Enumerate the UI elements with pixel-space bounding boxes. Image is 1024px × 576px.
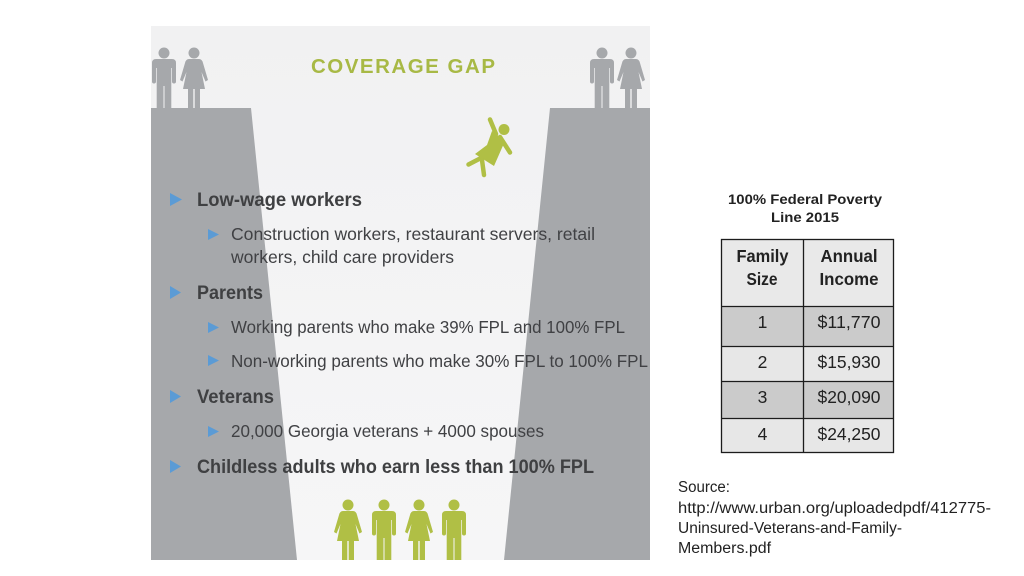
sub-bullet: construction workers [208, 224, 595, 267]
sub-bullet: Georgia veterans: 20,000 Georgia veterans + 4000 spouses [231, 421, 544, 441]
table: family size and annual income: $20,090 [818, 387, 881, 407]
source note [678, 479, 991, 557]
table: family size and annual income: $15,930 [818, 352, 881, 372]
bullet: veterans: Veterans [197, 386, 274, 408]
bullet: low-wage workers: Low-wage workers [197, 189, 362, 211]
panel: coverage gap background [151, 26, 650, 560]
table heading: Line 2015 [771, 209, 839, 225]
icon: couple on right cliff [590, 48, 645, 108]
table: family size and annual income: Family [736, 246, 789, 266]
bullet: parents: Parents [197, 282, 263, 304]
bullet: parents [170, 282, 263, 304]
source note: http://www.urban.org/uploadedpdf/412775- [678, 500, 991, 517]
left cliff [151, 108, 297, 560]
table: family size and annual income: $24,250 [818, 424, 881, 444]
table: family size and annual income: 3 [758, 387, 767, 407]
sub-bullet: construction workers: Construction workers, restaurant servers, retail [231, 224, 595, 244]
icon: couple on left cliff [152, 48, 208, 108]
table heading: 100% Federal Poverty [728, 191, 882, 207]
sub-bullet: construction workers: workers, child care providers [230, 247, 454, 267]
bullet list [170, 189, 648, 478]
table: family size and annual income [722, 240, 894, 452]
table: family size and annual income: Income [820, 269, 879, 289]
icon: four people at the bottom of the gap [334, 500, 466, 560]
table heading [728, 191, 882, 225]
bullet: childless adults: Childless adults who earn less than 100% FPL [197, 456, 594, 478]
source note: Uninsured-Veterans-and-Family- [678, 520, 902, 537]
icon: falling woman [468, 120, 510, 175]
sub-bullet: working parents: Working parents who make 39% FPL and 100% FPL [231, 317, 625, 337]
table: family size and annual income: 2 [758, 352, 767, 372]
right cliff [504, 108, 650, 560]
table: family size and annual income: Size [746, 269, 778, 289]
source note: Members.pdf [678, 540, 772, 557]
table: family size and annual income: $11,770 [818, 312, 881, 332]
table: family size and annual income: Annual [820, 246, 878, 266]
table: family size and annual income: 4 [758, 424, 768, 444]
table: family size and annual income: 1 [758, 312, 767, 332]
source note: Source: [678, 479, 730, 496]
sub-bullet: non-working parents: Non-working parents who make 30% FPL to 100% FPL [231, 351, 648, 371]
title: COVERAGE GAP [311, 55, 495, 78]
